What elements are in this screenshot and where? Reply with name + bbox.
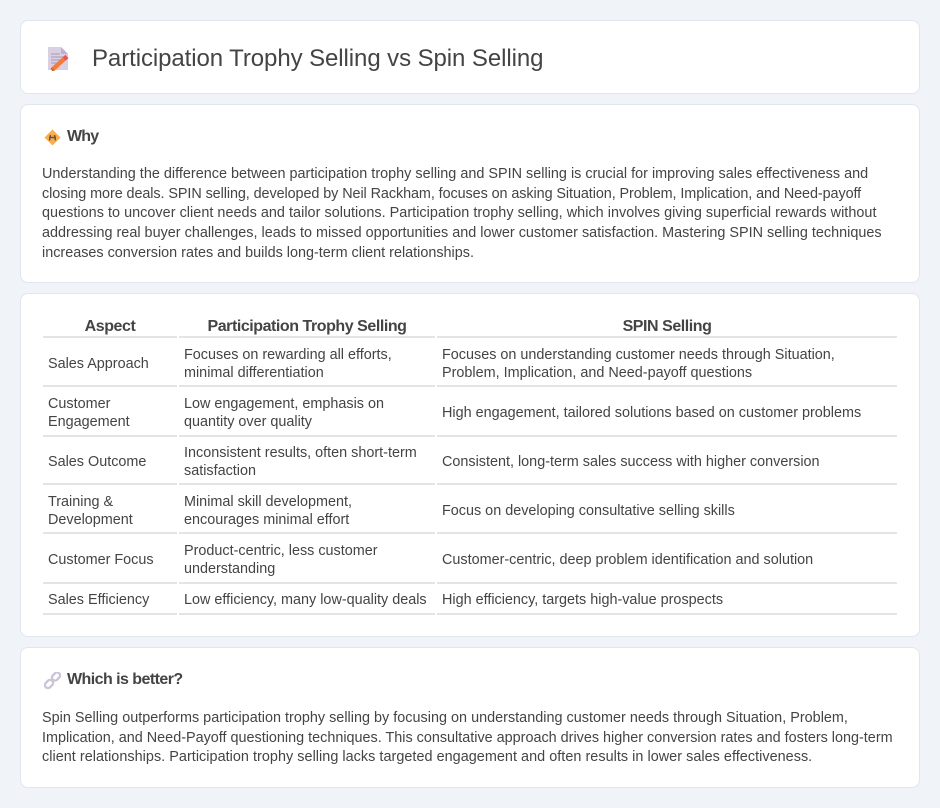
row: sales approach: Focuses on understanding customer needs through Situation, [442, 347, 835, 363]
row: customer focus: Customer Focus [48, 552, 154, 568]
icon: document with pencil [48, 47, 68, 71]
text block: which is better: Implication, and Need-Payoff questioning techniques. This consultative approach drives higher conversion rates and fosters long-term [42, 730, 893, 746]
row: training and development [43, 494, 897, 534]
row: customer engagement: Engagement [48, 414, 130, 430]
row: sales approach: Focuses on rewarding all efforts, [184, 347, 392, 363]
table header: Participation Trophy Selling [208, 318, 406, 335]
row: customer engagement [43, 396, 897, 437]
icon: link [44, 672, 61, 689]
row: sales outcome: Consistent, long-term sales success with higher conversion [442, 454, 820, 470]
row: training and development: Focus on developing consultative selling skills [442, 503, 735, 519]
text block: which is better [42, 710, 893, 765]
text block: which is better: client relationships. Participation trophy selling lacks targeted engagement and often results in lower sales effectiveness. [42, 749, 812, 765]
row: sales outcome: satisfaction [184, 463, 256, 479]
table header [43, 318, 897, 338]
panel: why [20, 104, 920, 283]
text block: why [42, 166, 882, 261]
row: customer engagement: quantity over quality [184, 414, 312, 430]
row: training and development: Development [48, 512, 133, 528]
row: customer focus: understanding [184, 561, 275, 577]
heading: why: Why [67, 128, 98, 145]
text block: why: increases conversion rates and builds long-term client relationships. [42, 245, 474, 261]
row: sales efficiency: High efficiency, targets high-value prospects [442, 592, 723, 608]
text block: why: closing more deals. SPIN selling, developed by Neil Rackham, focuses on asking Situation, Problem, Implication, and Need-payoff [42, 186, 861, 202]
row: sales approach: Sales Approach [48, 356, 149, 372]
row: customer focus: Product-centric, less customer [184, 543, 378, 559]
row: sales outcome [43, 445, 897, 485]
row: customer engagement: Customer [48, 396, 110, 412]
row: sales efficiency [43, 592, 897, 615]
text block: why: Understanding the difference between participation trophy selling and SPIN selling is crucial for improving sales effectiveness and [42, 166, 868, 182]
row: training and development: Training & [48, 494, 113, 510]
text block: which is better: Spin Selling outperforms participation trophy selling by focusing on understanding customer needs through Situation, Problem, [42, 710, 848, 726]
row: customer engagement: Low engagement, emphasis on [184, 396, 384, 412]
row: sales approach: minimal differentiation [184, 365, 324, 381]
row: sales efficiency: Low efficiency, many low-quality deals [184, 592, 427, 608]
row: training and development: encourages minimal effort [184, 512, 349, 528]
row: training and development: Minimal skill development, [184, 494, 352, 510]
heading: which is better: Which is better? [67, 671, 183, 688]
panel: title header [20, 20, 920, 94]
row: sales approach [43, 347, 897, 387]
panel: which is better [20, 647, 920, 788]
text block: why: addressing real buyer challenges, leads to missed opportunities and lower customer satisfaction. Mastering SPIN selling techniques [42, 225, 882, 241]
table header: Aspect [85, 318, 135, 335]
row: customer focus: Customer-centric, deep problem identification and solution [442, 552, 813, 568]
text block: why: questions to uncover client needs and tailor solutions. Participation trophy selling, which involves giving superficial rewards without [42, 205, 876, 221]
row: sales outcome: Sales Outcome [48, 454, 146, 470]
row: sales approach: Problem, Implication, and Need-payoff questions [442, 365, 752, 381]
panel: comparison table [20, 293, 920, 637]
table header: SPIN Selling [623, 318, 711, 335]
row: sales efficiency: Sales Efficiency [48, 592, 149, 608]
row: customer engagement: High engagement, tailored solutions based on customer problems [442, 405, 861, 421]
icon: warning diamond [44, 130, 60, 146]
row: customer focus [43, 543, 897, 584]
title: Participation Trophy Selling vs Spin Selling [92, 45, 543, 72]
row: sales outcome: Inconsistent results, often short-term [184, 445, 417, 461]
